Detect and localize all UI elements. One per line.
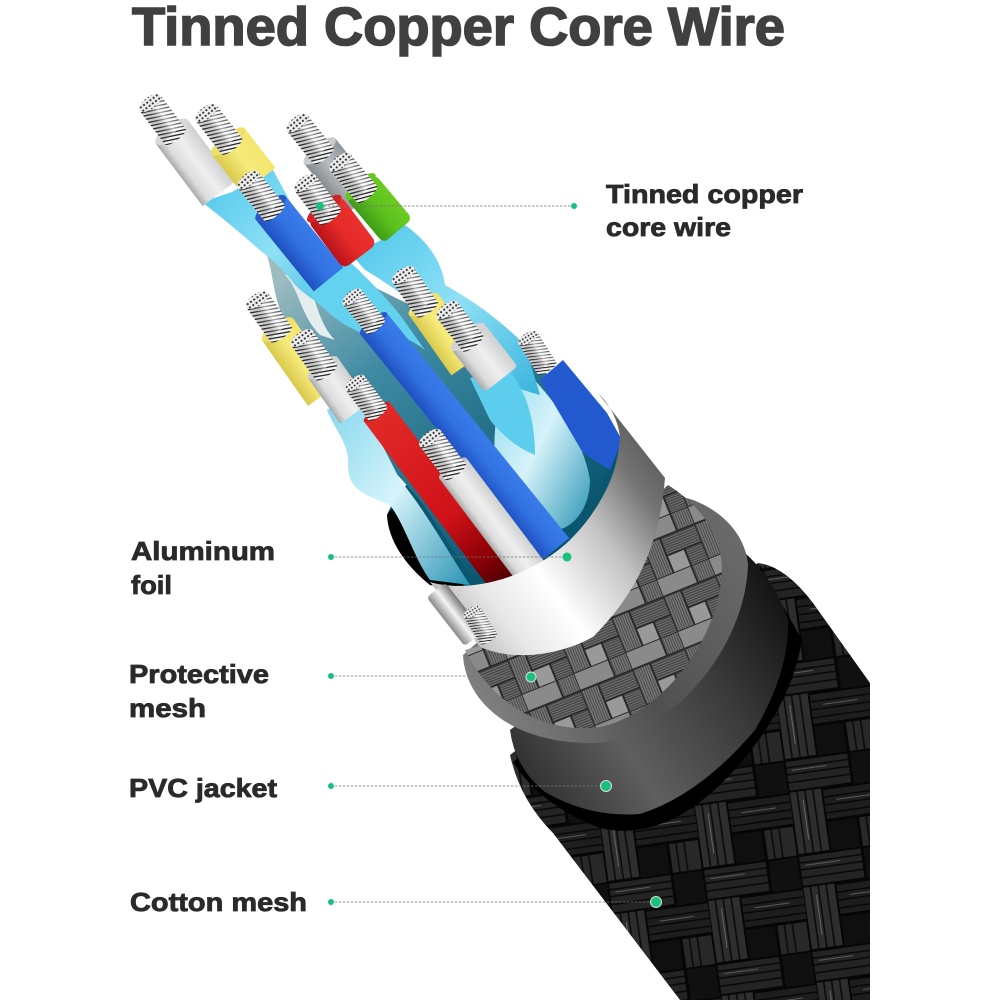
callout: aluminum foil [131, 536, 572, 600]
foil interior [387, 393, 622, 592]
wire: blue right [540, 360, 622, 470]
top left ribbon [202, 168, 355, 325]
callout: cotton mesh [130, 887, 662, 917]
cable illustration [130, 86, 870, 1000]
wire: yellow right [385, 260, 481, 375]
right glossy blob [494, 345, 590, 531]
left glossy blob [327, 395, 470, 585]
callout: protective mesh [129, 659, 536, 723]
callout: protective mesh: mesh [129, 693, 206, 723]
callout: aluminum foil: Aluminum [131, 536, 275, 566]
wire: blue right tip [516, 328, 558, 377]
ribbons and shielded pairs [202, 168, 610, 585]
callout: cotton mesh: Cotton mesh [130, 887, 307, 917]
aluminum foil [430, 393, 665, 655]
wire: green [322, 145, 412, 243]
PVC jacket [510, 553, 788, 815]
wire: white left [284, 323, 370, 424]
wires [130, 86, 622, 601]
wire: white long [413, 423, 551, 590]
callout: tinned copper core wire: Tinned copper [606, 179, 803, 209]
wire: red long [339, 369, 525, 601]
foil curl tube [427, 583, 484, 646]
wire: blue top [229, 163, 343, 291]
interior shadow [387, 507, 470, 592]
wire: red top [285, 166, 377, 269]
top right ribbon [352, 225, 540, 395]
cotton mesh braid [510, 563, 870, 1000]
callout: PVC jacket: PVC jacket [129, 773, 277, 803]
wire: white right [427, 292, 518, 392]
protective mesh [465, 485, 722, 728]
callout: aluminum foil: foil [131, 570, 172, 600]
inner highlight [285, 270, 335, 340]
wire: yellow left [238, 284, 339, 406]
wire: grey [278, 106, 377, 215]
callout: protective mesh: Protective [129, 659, 269, 689]
small exposed strand [461, 603, 499, 646]
right ribbon [470, 368, 535, 455]
teal inner mass [262, 245, 610, 575]
callout: tinned copper core wire [316, 179, 803, 242]
wire: white top [130, 86, 235, 206]
callout: PVC jacket [129, 773, 612, 803]
callout: tinned copper core wire: core wire [606, 212, 731, 242]
wire: blue long [335, 282, 569, 559]
wire: yellow top [186, 95, 275, 194]
central ribbon [300, 262, 425, 350]
jacket flange [463, 497, 748, 743]
shadow under PVC jacket [513, 565, 802, 831]
